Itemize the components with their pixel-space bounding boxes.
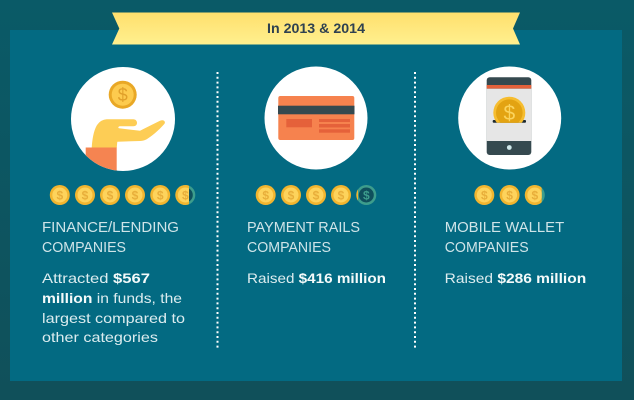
- coin row: finance: $: [56, 188, 63, 202]
- coin row: mobile: $: [481, 188, 488, 202]
- icon: mobile wallet: [458, 66, 561, 170]
- ribbon heading: In 2013 & 2014: [267, 21, 366, 36]
- icon: credit card: [264, 66, 368, 170]
- text: finance: million in funds, the: [42, 290, 182, 306]
- heading: mobile: MOBILE WALLET: [445, 219, 564, 236]
- divider: [216, 72, 218, 349]
- coin row: finance: $: [182, 188, 189, 202]
- coin row: finance: $: [132, 188, 139, 202]
- icon: hand holding coin: [71, 67, 175, 176]
- coin row: mobile: [474, 185, 545, 205]
- text: finance: other categories: [42, 329, 158, 345]
- heading: finance: COMPANIES: [42, 239, 126, 256]
- coin row: payment: $: [338, 188, 345, 202]
- icon: hand holding coin: $: [118, 85, 128, 105]
- coin row: payment: $: [313, 188, 320, 202]
- coin row: finance: $: [157, 188, 164, 202]
- text: finance: Attracted $567: [42, 270, 150, 286]
- heading: payment: COMPANIES: [247, 239, 331, 256]
- coin row: payment: $: [363, 188, 370, 202]
- text: finance: [42, 270, 185, 345]
- heading: mobile: [445, 219, 564, 256]
- text: mobile: Raised $286 million: [445, 270, 586, 286]
- heading: payment: [247, 219, 360, 256]
- coin row: finance: $: [82, 188, 89, 202]
- coin: [109, 81, 137, 109]
- icon: mobile wallet: $: [503, 102, 515, 125]
- heading: mobile: COMPANIES: [445, 239, 529, 256]
- text: payment: Raised $416 million: [247, 270, 386, 286]
- coin row: finance: [50, 185, 195, 205]
- sleeve: [86, 148, 117, 171]
- hand: [92, 119, 165, 148]
- heading: finance: [42, 219, 179, 256]
- coin row: mobile: $: [531, 188, 538, 202]
- coin row: mobile: $: [506, 188, 513, 202]
- coin row: payment: [256, 185, 376, 205]
- divider: [414, 72, 416, 349]
- coin row: payment: $: [288, 188, 295, 202]
- text: finance: largest compared to: [42, 310, 185, 326]
- ribbon heading: [112, 12, 520, 44]
- coin row: payment: $: [262, 188, 269, 202]
- heading: finance: FINANCE/LENDING: [42, 219, 179, 236]
- coin row: finance: $: [107, 188, 114, 202]
- heading: payment: PAYMENT RAILS: [247, 219, 360, 236]
